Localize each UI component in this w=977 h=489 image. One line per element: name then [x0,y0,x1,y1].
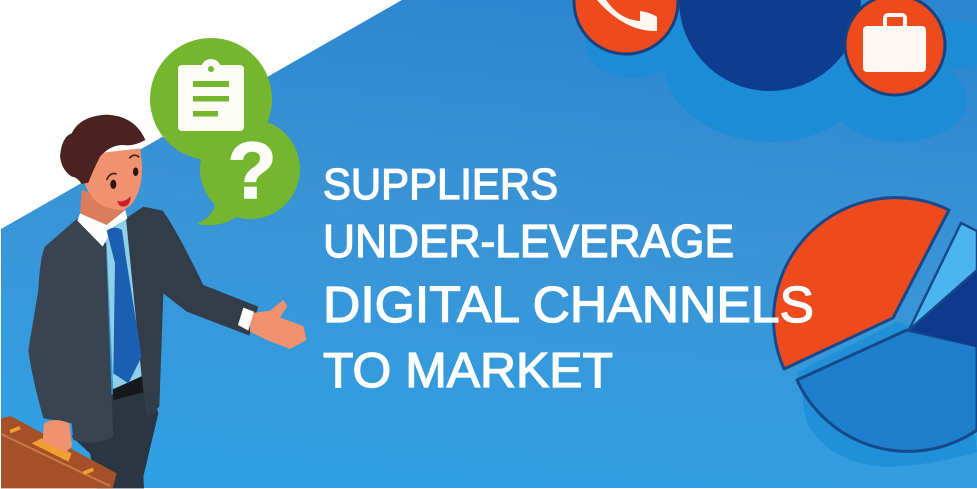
icon: briefcase [845,0,945,95]
title line 4: TO MARKET [323,344,613,398]
pie slice: navy [909,270,977,347]
eyes, brows and mouth [107,155,139,207]
tie [107,228,142,383]
businessman illustration [1,115,307,488]
jacket [28,218,113,443]
title line 2: UNDER-LEVERAGE [323,215,734,267]
pie slice: light blue [909,223,977,330]
pie slice: blue [797,330,977,451]
jacket right panel and arm [126,207,258,418]
shadow blobs [586,0,977,142]
left hand [43,420,72,453]
collar [77,210,127,247]
title [323,160,814,398]
icon: phone [574,0,678,54]
trousers [72,387,158,488]
green bubble: question mark [200,119,300,219]
pie slice: orange [774,198,949,369]
icon: clipboard [178,59,244,131]
bubble tail [197,195,240,225]
pie shadow [797,322,977,467]
hair [60,115,145,184]
question mark: ? [228,126,276,215]
speech bubbles [150,38,300,225]
shirt [80,217,145,390]
neck [80,190,126,227]
title line 1: SUPPLIERS [323,160,558,209]
shirt cuff [238,308,254,331]
face [83,148,142,210]
briefcase [1,416,117,488]
cluster: top-right icons with shadow [574,0,977,142]
green bubble: clipboard [150,38,272,160]
right hand [250,300,307,349]
belt [113,375,147,400]
navy circle [679,0,861,91]
chart: pie [774,198,977,467]
title line 3: DIGITAL CHANNELS [323,276,814,333]
